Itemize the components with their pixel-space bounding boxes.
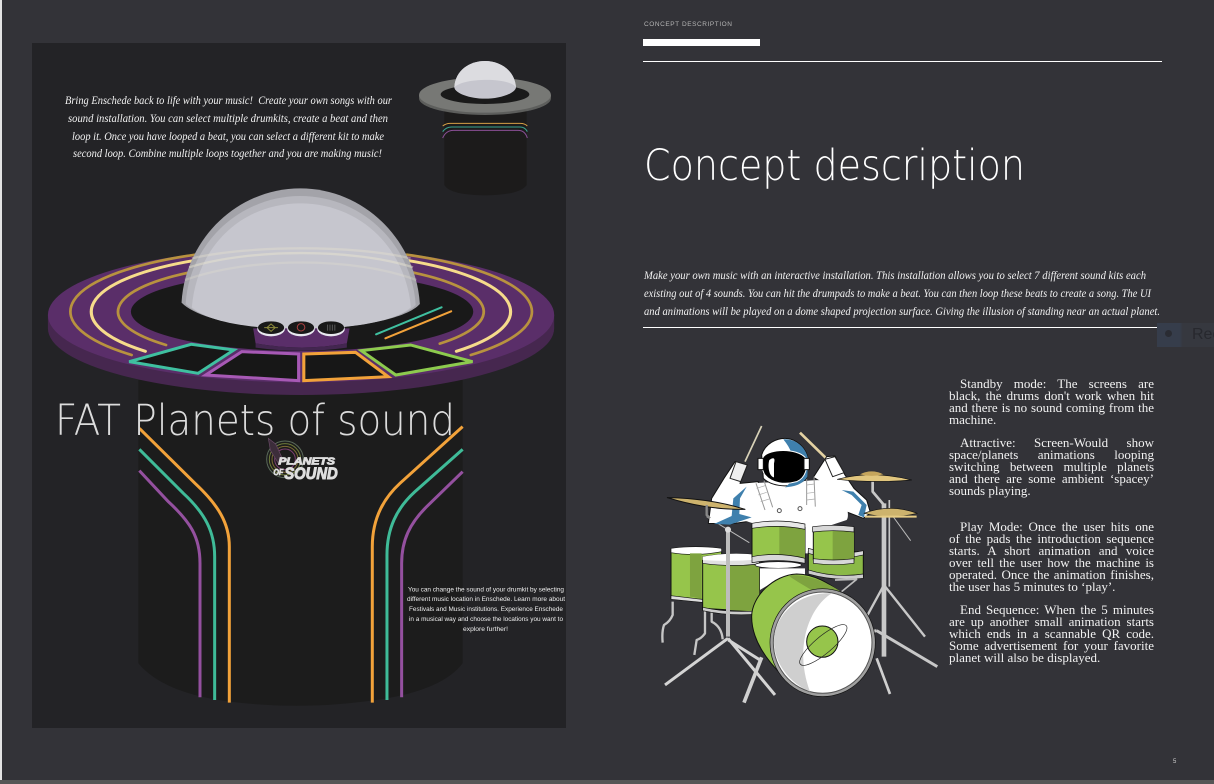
gold rings [70,255,532,355]
planets of sound logo: PLANETS [278,456,335,467]
indicator stripes [376,307,442,334]
right stands [857,482,937,667]
left edge strip [0,0,2,780]
attractive mode [949,435,1154,498]
drum pad: orange [304,352,388,381]
intro text: Bring Enschede back to life with your music! Create your own songs with our [65,93,392,107]
control console [253,321,350,351]
intro text: second loop. Combine multiple loops together and you are making music! [73,146,382,160]
end sequence: which ends in a scannable QR code. [949,626,1154,641]
play mode: operated. Once the animation finishes, [949,567,1154,582]
cymbal: hi-hat [864,508,917,518]
section label: CONCEPT DESCRIPTION [644,21,732,28]
planets of sound logo: SOUND [284,464,338,483]
top rule [643,61,1162,62]
attractive mode: space/planets animations looping [949,447,1154,462]
end sequence: Some advertisement for your favorite [949,638,1154,653]
drum pad: green [361,345,473,375]
standby mode: Standby mode: The screens are [960,376,1154,391]
bass drum [744,574,890,703]
drumkit location text: different music location in Enschede. Learn more about [407,596,565,603]
planet ring disc with drum pads [48,188,554,395]
attractive mode: sounds playing. [949,483,1031,498]
panel: installation poster [32,43,566,728]
rack tom centre [752,521,805,568]
drumkit location text [407,586,565,633]
lower rule [643,327,1162,328]
rack tom right [813,525,854,565]
drumkit location text: in a musical way and choose the locations you want to [409,616,564,623]
play mode: starts. A short animation and voice [949,543,1154,558]
attractive mode: switching between multiple planets [949,459,1154,474]
attractive mode: Attractive: Screen-Would show [960,435,1154,450]
standby mode [949,376,1154,427]
intro text: loop it. Once you have looped a beat, you can select a different kit to make [72,129,385,143]
standby mode: black, the drums don't work when hit [949,388,1154,403]
play mode [949,519,1154,594]
standby mode: machine. [949,412,996,427]
drum sticks [745,426,762,462]
play mode: the user has 5 minutes to ‘play’. [949,579,1115,594]
floor tom right [703,554,759,615]
cylinder base [138,380,463,706]
drumkit location text: Festivals and Music institutions. Experience Enschede [409,606,563,613]
standby mode: and there is no sound coming from the [949,400,1154,415]
astronaut helmet [758,438,809,487]
planets of sound logo [267,438,338,483]
intro text [65,93,392,160]
end sequence: End Sequence: When the 5 minutes [960,602,1154,617]
attractive mode: and there are some ambient ‘spacey’ [949,471,1154,486]
left stands [662,602,723,655]
astronaut legs [760,568,805,590]
end sequence: are up another small animation starts [949,614,1154,629]
intro text: sound installation. You can select multiple drumkits, create a beat and then [68,111,388,125]
end sequence [949,602,1154,665]
right neon stripes [372,427,463,703]
cymbal: crash left [667,498,745,518]
drum pad: purple [206,352,299,381]
ghost record widget [1157,323,1214,347]
play mode: over tell the user how the machine is [949,555,1154,570]
page number: 5 [1173,759,1176,765]
astronaut suit [708,456,871,553]
drumkit location text: explore further! [463,626,508,633]
drumkit location text: You can change the sound of your drumkit by selecting [408,586,564,594]
concept summary text [643,268,1160,318]
projection dome [182,188,420,329]
planets of sound logo: OF [273,467,284,477]
play mode: Play Mode: Once the user hits one [960,519,1154,534]
bottom edge strip [0,780,1214,784]
left neon stripes [139,428,229,703]
section accent bar [643,39,760,46]
end sequence: planet will also be displayed. [949,650,1100,665]
play mode: of the pads the introduction sequence [949,531,1154,546]
floor tom left [671,547,722,604]
mode descriptions [949,376,1154,665]
drum pad: teal [129,344,234,373]
astronaut drummer illustration [662,426,937,703]
cymbal: ride top right [837,471,912,482]
small installation preview [419,61,551,195]
right side tom [808,548,863,592]
